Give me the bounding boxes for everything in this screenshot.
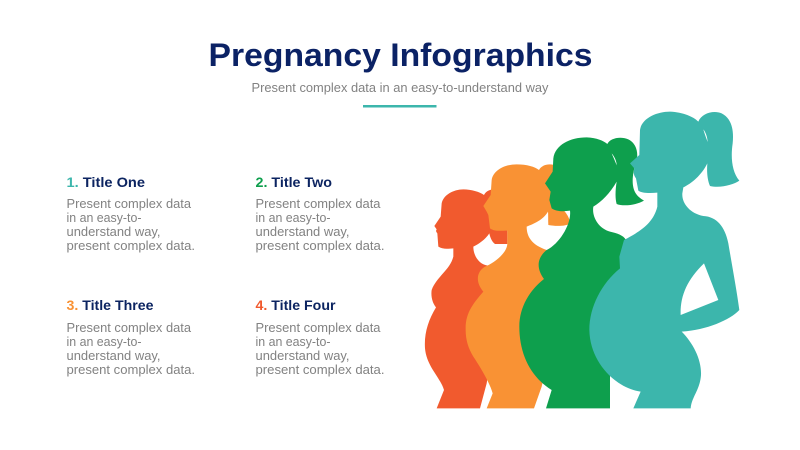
text block: item two: in an easy-to- [256, 211, 330, 225]
text block: item one: present complex data. [66, 239, 195, 253]
text block: item three: in an easy-to- [66, 335, 142, 349]
text block: item three: Present complex data [66, 321, 191, 335]
text block: item one: understand way, [66, 225, 160, 239]
silhouette: green third stage [519, 137, 653, 408]
text block: item four: Present complex data [256, 321, 381, 335]
title underline accent [363, 105, 436, 108]
silhouette: teal fourth stage [589, 112, 739, 408]
text block: item four [256, 297, 384, 377]
text block: item three [66, 297, 195, 377]
text block: item one: 1. Title One [66, 174, 145, 190]
text block: item three: present complex data. [66, 363, 195, 377]
subtitle: Present complex data in an easy-to-understand way [252, 81, 549, 95]
title: Pregnancy Infographics [208, 37, 592, 73]
text block: item four: understand way, [256, 349, 350, 363]
text block: item one: in an easy-to- [66, 211, 142, 225]
text block: item four: in an easy-to- [256, 335, 330, 349]
text block: item one [66, 174, 195, 253]
silhouette: red first stage [425, 189, 507, 408]
text block: item three: 3. Title Three [66, 297, 154, 313]
text block: item two: present complex data. [256, 239, 384, 253]
text block: item four: present complex data. [256, 363, 384, 377]
text block: item two: 2. Title Two [256, 174, 332, 190]
silhouette: orange second stage [466, 164, 571, 408]
text block: item one: Present complex data [66, 197, 191, 211]
text block: item two: understand way, [256, 225, 350, 239]
pregnancy silhouettes illustration [425, 112, 739, 408]
text block: item four: 4. Title Four [256, 297, 336, 313]
text block: item two [256, 174, 384, 253]
text block: item two: Present complex data [256, 197, 381, 211]
text block: item three: understand way, [66, 349, 160, 363]
